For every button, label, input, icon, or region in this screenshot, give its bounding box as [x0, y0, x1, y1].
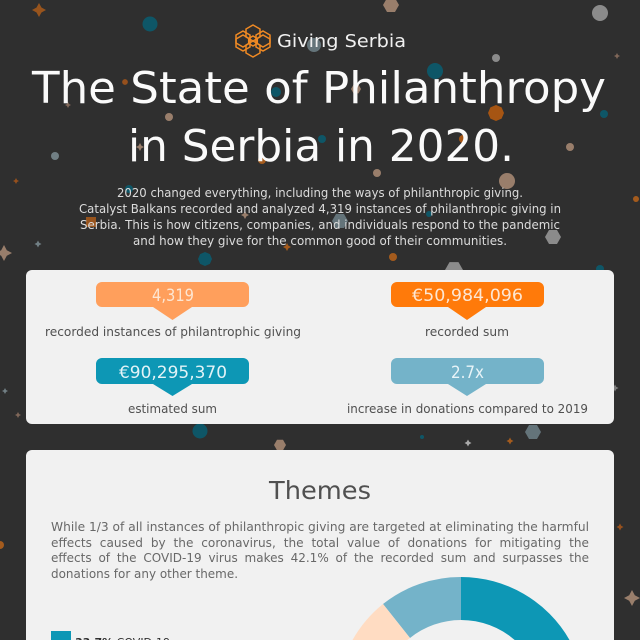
- legend: COVID-19: [51, 631, 170, 640]
- title: The State of Philanthropy: [31, 63, 606, 114]
- stat: recorded sum: [391, 282, 544, 339]
- segment: COVID-19: [461, 577, 570, 640]
- intro text: 2020 changed everything, including the ways of philanthropic giving.: [117, 186, 523, 200]
- stat: increase in donations: 2.7x: [451, 363, 484, 383]
- panel: themes: [26, 450, 614, 640]
- segment: peach: [352, 604, 410, 640]
- intro text: and how they give for the common good of their communities.: [133, 234, 507, 248]
- themes paragraph: effects caused by the coronavirus, the total value of donations for mitigating the: [51, 536, 589, 550]
- stat: estimated sum: [96, 358, 249, 416]
- stat: recorded sum: €50,984,096: [412, 286, 523, 306]
- intro text: [79, 186, 561, 248]
- themes paragraph: effects of the COVID-19 virus makes 42.1% of the recorded sum and surpasses the: [51, 551, 589, 565]
- themes paragraph: [51, 520, 589, 581]
- panel: key figures: [26, 270, 614, 424]
- stat: recorded instances: recorded instances of philantrophic giving: [45, 325, 301, 339]
- stat: increase in donations: increase in donations compared to 2019: [347, 402, 588, 416]
- icon: Giving Serbia logo: [236, 25, 270, 57]
- themes paragraph: While 1/3 of all instances of philanthropic giving are targeted at eliminating the harmful: [51, 520, 589, 534]
- stat: increase in donations: [347, 358, 588, 416]
- heading: themes: Themes: [268, 476, 371, 505]
- stat: estimated sum: €90,295,370: [119, 363, 227, 383]
- stat: recorded instances: 4,319: [152, 286, 194, 306]
- stat: recorded instances: [45, 282, 301, 339]
- title: in Serbia in 2020.: [128, 121, 514, 172]
- brand name: Giving Serbia: [277, 31, 406, 52]
- stat: estimated sum: estimated sum: [128, 402, 217, 416]
- stat: recorded sum: recorded sum: [425, 325, 509, 339]
- intro text: Catalyst Balkans recorded and analyzed 4,319 instances of philanthropic giving in: [79, 202, 561, 216]
- intro text: Serbia. This is how citizens, companies, and individuals respond to the pandemic: [80, 218, 560, 232]
- segment: light blue: [383, 577, 461, 638]
- donut chart: [352, 577, 570, 640]
- themes paragraph: donations for any other theme.: [51, 567, 238, 581]
- title: [31, 63, 606, 172]
